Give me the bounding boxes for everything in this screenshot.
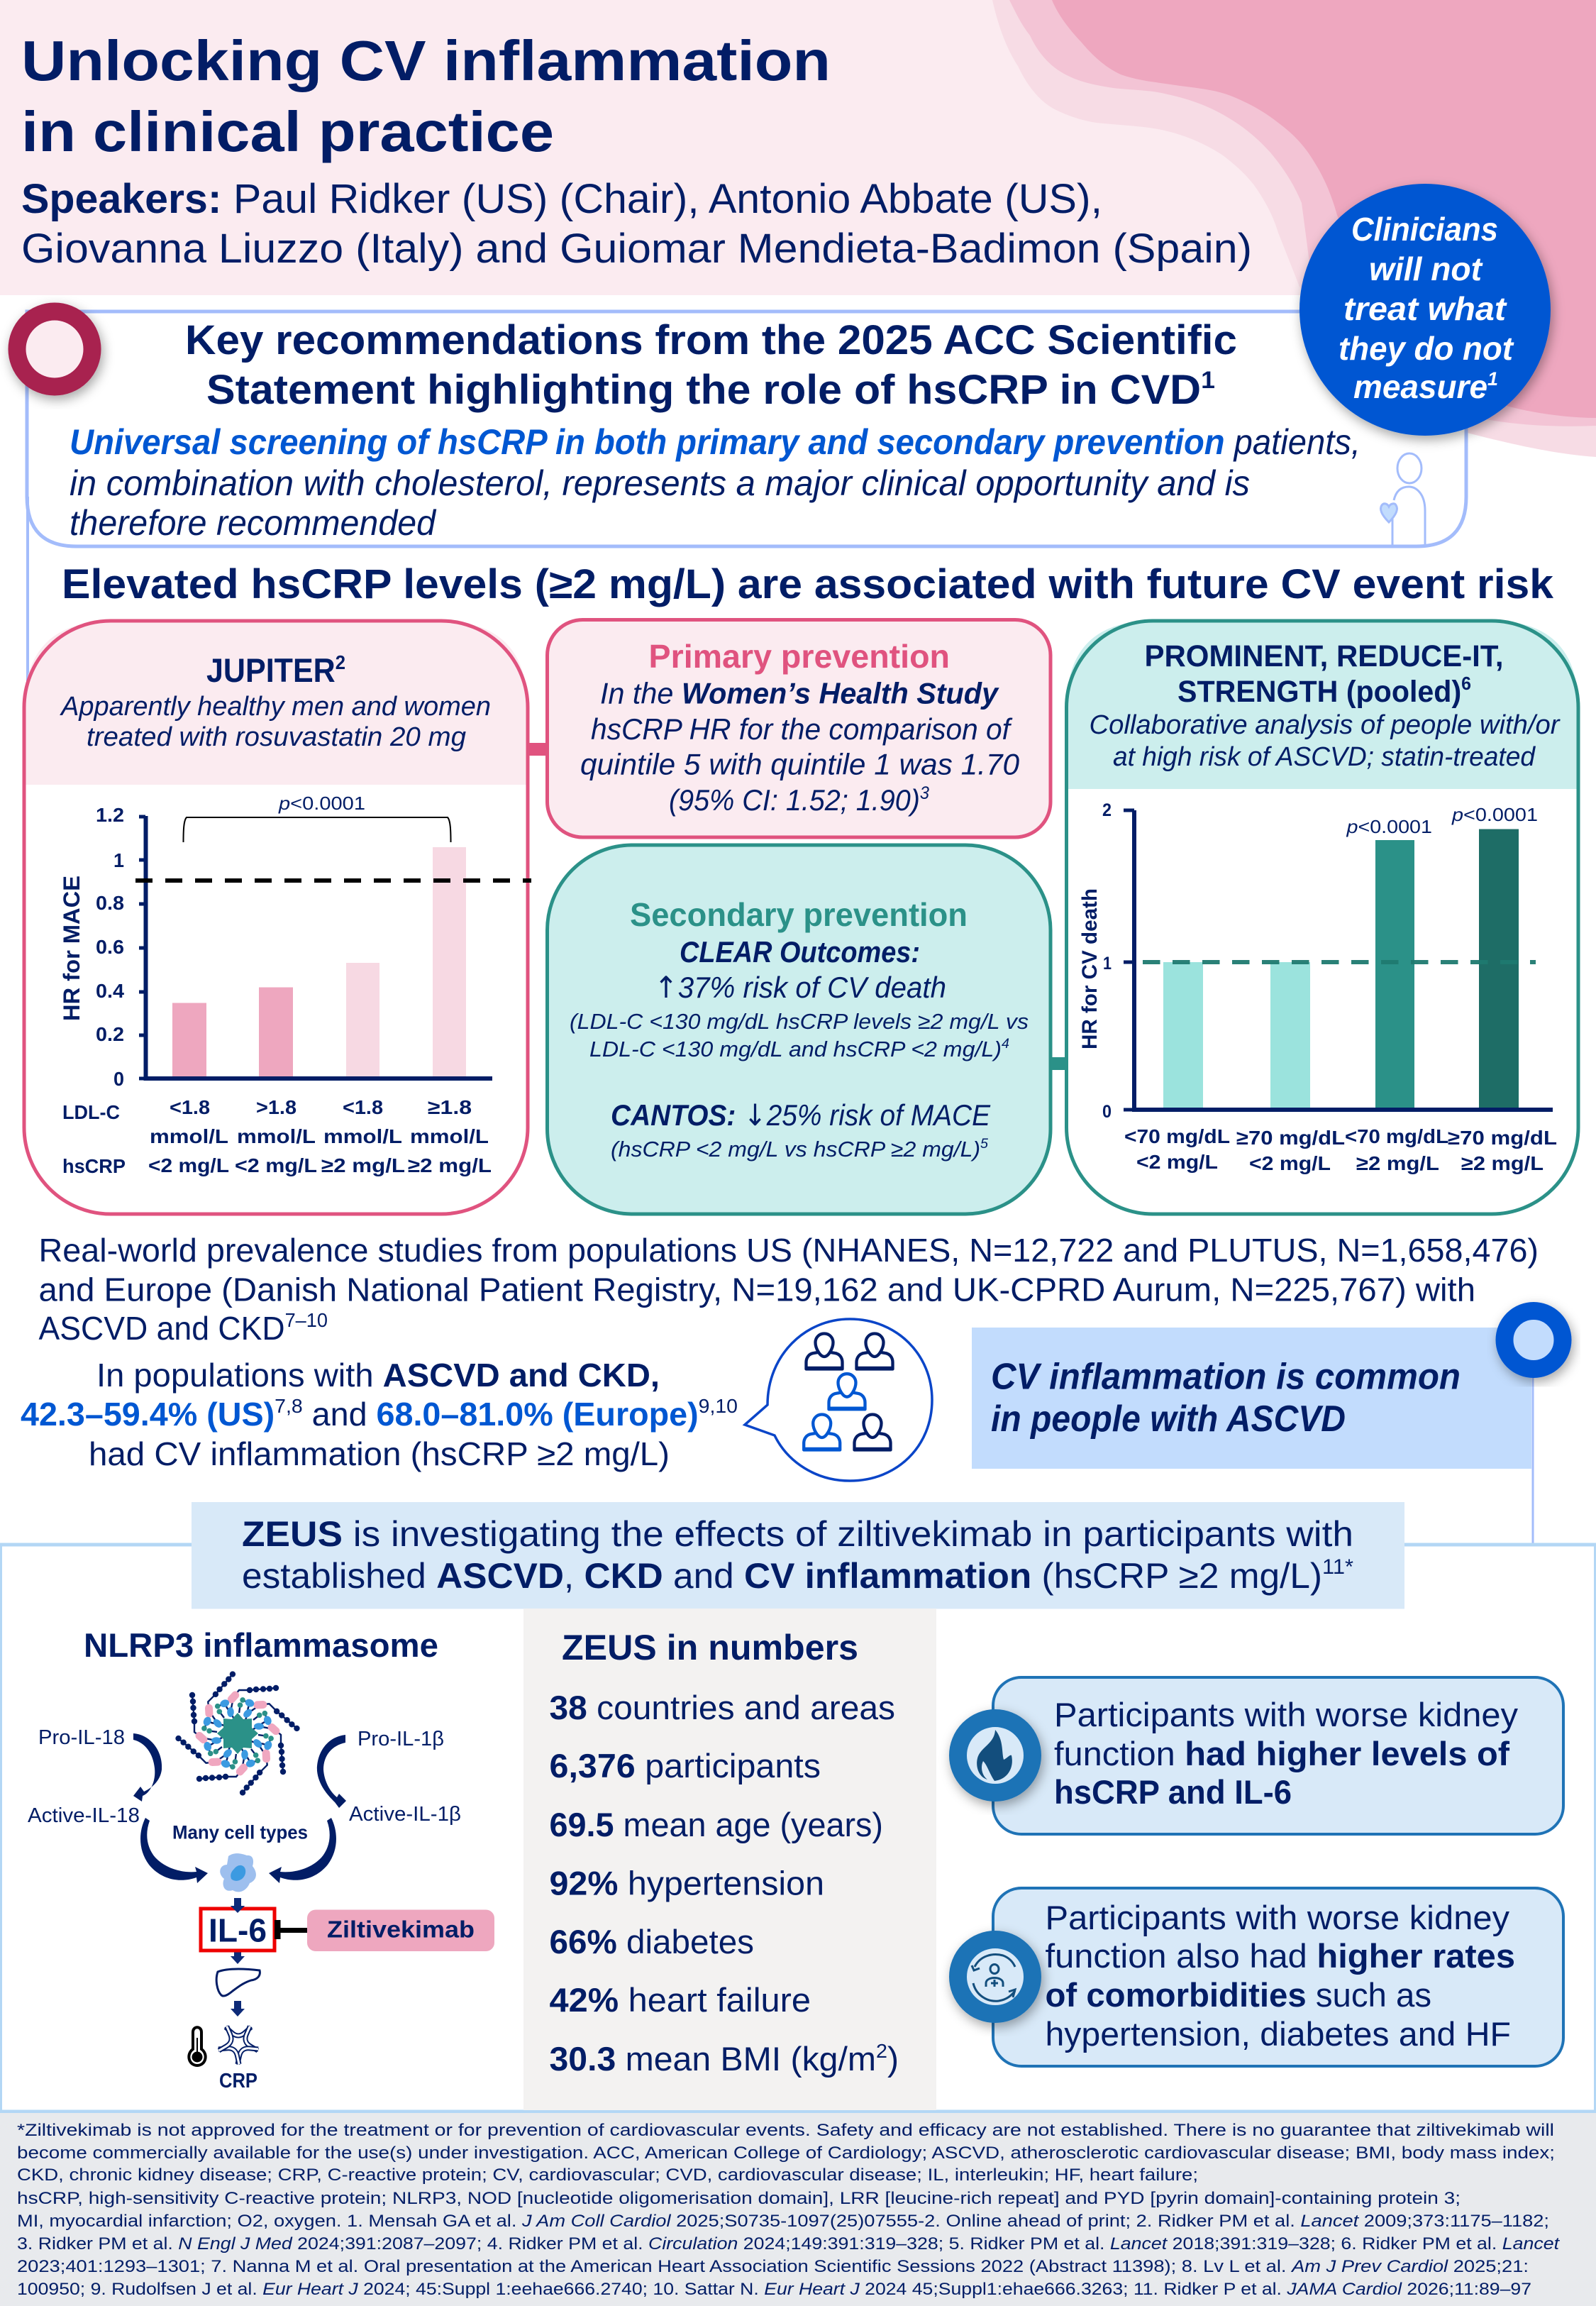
pooled description xyxy=(1090,710,1561,772)
bar chart: HR for MACE: 1.2 xyxy=(96,804,124,826)
callout: CV inflammation is common: CV inflammation is common xyxy=(991,1357,1461,1398)
JUPITER description xyxy=(60,692,491,752)
heading: elevated hsCRP: Elevated hsCRP levels (≥2 mg/L) are associated with future CV event risk xyxy=(62,561,1554,607)
speakers xyxy=(21,176,1252,272)
footer: references and abbreviations: 2023;401:1293–1301; 7. Nanna M et al. Oral presentation at the American Heart Association Scientific Sessions 2022 (Abstract 11398); 8. Lv L et al. Am J Prev Cardiol 2025;21: xyxy=(17,2257,1529,2276)
panel: secondary prevention: ↑37% risk of CV death xyxy=(654,970,946,1005)
bar chart: HR for MACE: LDL-C xyxy=(62,1101,120,1123)
panel: primary prevention xyxy=(548,620,1051,837)
bar chart: HR for MACE: <1.8 xyxy=(343,1096,383,1118)
footer: references and abbreviations: CKD, chronic kidney disease; CRP, C-reactive protein; CV, cardiovascular; CVD, cardiovascular disease; IL, interleukin; HF, heart failure; xyxy=(17,2166,1198,2185)
panel: key recommendations xyxy=(27,311,1466,681)
footer: references and abbreviations: *Ziltivekimab is not approved for the treatment or for prevention of cardiovascular events. Safety and efficacy are not established. There is no guarantee that ziltivekimab will xyxy=(17,2121,1554,2140)
JUPITER heading: JUPITER xyxy=(206,651,348,689)
ZEUS banner xyxy=(192,1502,1404,1609)
text: prevalence results: 9,10 xyxy=(699,1395,738,1417)
NLRP3 diagram: Active-IL-1β xyxy=(349,1803,461,1826)
bar chart: HR for CV death: ≥2 mg/L xyxy=(1356,1152,1439,1174)
NLRP3 heading: NLRP3 inflammasome xyxy=(84,1626,438,1664)
heading: key recommendations xyxy=(185,317,1237,413)
panel: ZEUS in numbers: 6,376 participants xyxy=(549,1747,821,1784)
panel: primary prevention: (95% CI: 1.52; 1.90) xyxy=(669,783,936,817)
icon: person in cycle xyxy=(958,1940,1033,2014)
panel: secondary prevention: 5 xyxy=(980,1137,988,1152)
bar chart: HR for CV death: HR for CV death xyxy=(1078,888,1102,1049)
bar chart: HR for MACE: mmol/L xyxy=(237,1125,316,1147)
callout: clinicians: Clinicians xyxy=(1351,211,1498,248)
footer: references and abbreviations: hsCRP, high-sensitivity C-reactive protein; NLRP3, NOD [nucleotide oligomerisation domain], LRR [leucine-rich repeat] and PYD [pyrin domain]-containing protein 3; xyxy=(17,2189,1461,2208)
callout: CV inflammation is common: in people with ASCVD xyxy=(991,1399,1346,1440)
bar chart: HR for MACE: ≥2 mg/L xyxy=(321,1154,405,1176)
pooled description: Collaborative analysis of people with/or xyxy=(1090,710,1561,740)
icon: flame xyxy=(958,1719,1033,1792)
panel: ZEUS in numbers: 92% hypertension xyxy=(549,1865,824,1902)
speakers: Speakers: Paul Ridker (US) (Chair), Antonio Abbate (US), xyxy=(21,176,1102,222)
bar chart: HR for CV death: ≥2 mg/L xyxy=(1461,1152,1544,1174)
text: real-world prevalence studies: and Europe (Danish National Patient Registry, N=19,162 and UK-CPRD Aurum, N=225,767) with xyxy=(38,1271,1475,1308)
bar chart: HR for CV death: 1 xyxy=(1103,954,1112,973)
panel: JUPITER xyxy=(24,621,531,1214)
speakers: Giovanna Liuzzo (Italy) and Guiomar Mendieta-Badimon (Spain) xyxy=(21,226,1252,272)
bar chart: HR for MACE: mmol/L xyxy=(323,1125,402,1147)
icon: speech bubble with people xyxy=(745,1319,932,1481)
panel: secondary prevention: (hsCRP <2 mg/L vs hsCRP ≥2 mg/L) xyxy=(611,1137,968,1162)
bar chart: HR for MACE: HR for MACE xyxy=(59,876,84,1021)
bar chart: HR for CV death: <70 mg/dL xyxy=(1124,1125,1230,1147)
pooled heading: PROMINENT, REDUCE-IT, xyxy=(1145,639,1504,673)
callout: clinicians: measure xyxy=(1353,368,1487,405)
bar chart: HR for MACE: p<0.0001 xyxy=(278,793,365,814)
panel: primary prevention: quintile 5 with quintile 1 was 1.70 xyxy=(580,748,1020,780)
NLRP3 diagram: Pro-IL-1β xyxy=(358,1728,444,1750)
panel: secondary prevention xyxy=(548,845,1051,1214)
callout: clinicians xyxy=(1299,184,1551,436)
bar chart: HR for MACE: >1.8 xyxy=(256,1096,297,1118)
panel: secondary prevention: CLEAR Outcomes: xyxy=(680,935,920,969)
callout: higher rates of comorbidities: function also had higher rates xyxy=(1046,1937,1515,1975)
text: prevalence results: and xyxy=(303,1396,377,1433)
panel: ZEUS in numbers: ZEUS in numbers xyxy=(562,1628,858,1667)
Ziltivekimab label xyxy=(307,1910,494,1951)
bar chart: HR for MACE: mmol/L xyxy=(410,1125,489,1147)
bar chart: HR for MACE: 0.6 xyxy=(96,936,124,958)
panel: secondary prevention: CANTOS: ↓25% risk of MACE xyxy=(611,1098,991,1132)
icon: blue ring xyxy=(1504,1311,1563,1369)
panel: ZEUS in numbers: 69.5 mean age (years) xyxy=(549,1806,883,1843)
recommendation text: in combination with cholesterol, represents a major clinical opportunity and is xyxy=(70,463,1250,503)
text: real-world prevalence studies: 7–10 xyxy=(285,1309,328,1331)
bar chart: HR for MACE: <2 mg/L xyxy=(235,1154,317,1176)
pooled heading: 6 xyxy=(1461,673,1471,694)
bar chart: HR for CV death: ≥70 mg/dL xyxy=(1448,1127,1557,1149)
connector line xyxy=(1532,1369,1534,1544)
callout: CV inflammation is common xyxy=(972,1328,1531,1469)
panel: ZEUS in numbers xyxy=(523,1609,936,2110)
callout: higher hsCRP and IL-6 xyxy=(958,1677,1563,1834)
icon: CRP pentamer xyxy=(218,2026,258,2064)
recommendation text: therefore recommended xyxy=(70,503,437,543)
callout: higher hsCRP and IL-6: Participants with worse kidney xyxy=(1054,1696,1519,1733)
callout: clinicians: they do not xyxy=(1339,330,1514,367)
icon: person with heart xyxy=(1380,453,1425,546)
NLRP3 diagram: Many cell types xyxy=(172,1822,308,1843)
bar chart: HR for CV death: <70 mg/dL xyxy=(1345,1125,1448,1147)
bar chart: HR for MACE xyxy=(59,793,531,1177)
title: in clinical practice xyxy=(21,100,554,163)
title xyxy=(21,29,831,163)
inhibition bar xyxy=(275,1920,307,1939)
bar chart: HR for MACE: <1.8 xyxy=(170,1096,210,1118)
callout: higher hsCRP and IL-6: function had higher levels of xyxy=(1054,1735,1509,1772)
panel: primary prevention: 3 xyxy=(920,783,929,803)
text: prevalence results: 68.0–81.0% (Europe) xyxy=(377,1396,699,1433)
connectors xyxy=(528,743,1068,1070)
callout: higher rates of comorbidities: of comorbidities such as xyxy=(1046,1976,1431,2014)
heading: key recommendations: Statement highlighting the role of hsCRP in CVD xyxy=(206,367,1154,413)
recommendation text xyxy=(70,422,1361,543)
icon: thermometer xyxy=(189,2027,206,2065)
bar chart: HR for MACE: <2 mg/L xyxy=(148,1154,229,1176)
bar chart: HR for MACE: ≥2 mg/L xyxy=(408,1154,492,1176)
text: prevalence results xyxy=(21,1357,738,1472)
panel: ZEUS in numbers: ) xyxy=(887,2040,899,2078)
bar chart: HR for MACE: 0.8 xyxy=(96,892,124,914)
IL-6 box xyxy=(201,1905,275,1951)
footer: references and abbreviations xyxy=(0,2113,1596,2306)
panel: ZEUS in numbers: 30.3 mean BMI (kg/m xyxy=(549,2040,870,2078)
bar chart: HR for CV death: <2 mg/L xyxy=(1249,1152,1331,1174)
callout: clinicians: 1 xyxy=(1487,368,1498,390)
bar chart: HR for MACE: ≥1.8 xyxy=(428,1096,472,1118)
bar chart: HR for MACE: 1 xyxy=(113,849,124,871)
panel: PROMINENT, REDUCE-IT, STRENGTH xyxy=(1067,621,1578,1214)
footer: references and abbreviations: 100950; 9. Rudolfsen J et al. Eur Heart J 2024; 45:Suppl 1:eehae666.2740; 10. Sattar N. Eur Heart J 2024 45;Suppl1:ehae666.3263; 11. Ridker P et al. JAMA Cardiol 2026;11:89–97 xyxy=(17,2280,1531,2299)
heading: key recommendations: 1 xyxy=(1201,367,1215,394)
bar chart: HR for MACE: mmol/L xyxy=(150,1125,228,1147)
footer: references and abbreviations: MI, myocardial infarction; O2, oxygen. 1. Mensah GA et al. J Am Coll Cardiol 2025;S0735-1097(25)07555-2. Online ahead of print; 2. Ridker PM et al. Lancet 2009;373:1175–1182; xyxy=(17,2212,1549,2231)
ZEUS banner: ZEUS is investigating the effects of ziltivekimab in participants with xyxy=(242,1514,1353,1554)
JUPITER description: treated with rosuvastatin 20 mg xyxy=(87,722,466,752)
Ziltivekimab label: Ziltivekimab xyxy=(327,1916,475,1943)
callout: higher rates of comorbidities: Participants with worse kidney xyxy=(1046,1899,1510,1936)
text: real-world prevalence studies: ASCVD and CKD xyxy=(38,1310,292,1347)
NLRP3 diagram: CRP xyxy=(219,2070,257,2092)
callout: clinicians: will not xyxy=(1369,250,1483,287)
NLRP3 diagram xyxy=(28,1626,494,2092)
panel: secondary prevention: LDL-C <130 mg/dL and hsCRP <2 mg/L) xyxy=(589,1037,987,1061)
IL-6 box: IL-6 xyxy=(209,1911,267,1948)
panel: secondary prevention: 4 xyxy=(1002,1037,1009,1052)
callout: higher hsCRP and IL-6: hsCRP and IL-6 xyxy=(1054,1773,1292,1811)
panel: ZEUS in numbers: 2 xyxy=(876,2040,887,2062)
arrows: curved pathways xyxy=(133,1733,346,1883)
NLRP3 diagram: Pro-IL-18 xyxy=(38,1726,125,1749)
text: prevalence results: 42.3–59.4% (US) xyxy=(21,1396,275,1433)
panel: secondary prevention: (LDL-C <130 mg/dL hsCRP levels ≥2 mg/L vs xyxy=(570,1009,1029,1034)
callout: higher rates of comorbidities xyxy=(958,1888,1563,2066)
title: Unlocking CV inflammation xyxy=(21,29,831,92)
bar chart: HR for MACE: hsCRP xyxy=(62,1155,126,1177)
callout: clinicians: treat what xyxy=(1343,290,1507,327)
footer: references and abbreviations: 3. Ridker PM et al. N Engl J Med 2024;391:2087–2097; 4. Ridker PM et al. Circulation 2024;149:391:319–328; 5. Ridker PM et al. Lancet 2018;391:319–328; 6. Ridker PM et al. Lancet xyxy=(17,2234,1560,2253)
panel: primary prevention: hsCRP HR for the comparison of xyxy=(591,712,1013,746)
JUPITER heading: 2 xyxy=(336,651,345,673)
icon: liver xyxy=(216,1969,260,1996)
callout: higher rates of comorbidities: hypertension, diabetes and HF xyxy=(1046,2015,1511,2053)
panel: primary prevention: In the Women’s Health Study xyxy=(600,677,1000,710)
bar chart: HR for MACE: 0.4 xyxy=(96,980,124,1002)
panel: ZEUS xyxy=(0,1502,1596,2112)
text: real-world prevalence studies: Real-world prevalence studies from populations US (NHANES, N=12,722 and PLUTUS, N=1,658,476) xyxy=(38,1232,1539,1269)
bar chart: HR for MACE: 0.2 xyxy=(96,1023,124,1045)
bar chart: HR for CV death: 0 xyxy=(1102,1102,1112,1122)
icon: cell xyxy=(220,1853,256,1892)
pooled description: at high risk of ASCVD; statin-treated xyxy=(1113,742,1536,772)
panel: ZEUS in numbers: 66% diabetes xyxy=(549,1923,754,1960)
text: prevalence results: In populations with ASCVD and CKD, xyxy=(96,1357,660,1394)
text: prevalence results: had CV inflammation (hsCRP ≥2 mg/L) xyxy=(89,1435,670,1472)
header background xyxy=(0,0,1596,457)
heading: key recommendations: Key recommendations from the 2025 ACC Scientific xyxy=(185,317,1237,363)
text: real-world prevalence studies xyxy=(38,1232,1539,1347)
footer: references and abbreviations: become commercially available for the use(s) under investigation. ACC, American College of Cardiology; ASCVD, atherosclerotic cardiovascular disease; BMI, body mass index; xyxy=(17,2144,1555,2163)
bar chart: HR for CV death: p<0.0001 xyxy=(1346,816,1432,837)
icon: crimson ring xyxy=(17,311,92,387)
bar chart: HR for CV death xyxy=(1078,800,1557,1174)
pooled heading: STRENGTH (pooled) xyxy=(1177,675,1474,709)
bar chart: HR for MACE: 0 xyxy=(113,1068,124,1090)
ZEUS banner: 11* xyxy=(1322,1555,1353,1579)
bar chart: HR for CV death: p<0.0001 xyxy=(1451,804,1538,825)
bar chart: HR for CV death: 2 xyxy=(1102,800,1112,820)
panel: secondary prevention: Secondary prevention xyxy=(630,896,968,933)
panel: primary prevention: Primary prevention xyxy=(648,638,950,675)
bar chart: HR for CV death: ≥70 mg/dL xyxy=(1236,1127,1345,1149)
NLRP3 diagram: Active-IL-18 xyxy=(28,1804,140,1827)
recommendation text: Universal screening of hsCRP in both primary and secondary prevention patients, xyxy=(70,422,1361,462)
icon: inflammasome xyxy=(174,1670,301,1797)
pooled heading xyxy=(1145,639,1504,709)
panel: ZEUS in numbers: 42% heart failure xyxy=(549,1981,811,2019)
JUPITER description: Apparently healthy men and women xyxy=(60,692,491,722)
bar chart: HR for CV death: <2 mg/L xyxy=(1136,1151,1218,1173)
text: prevalence results: 7,8 xyxy=(275,1395,303,1417)
ZEUS banner: established ASCVD, CKD and CV inflammation (hsCRP ≥2 mg/L) xyxy=(242,1556,1314,1596)
panel: ZEUS in numbers: 38 countries and areas xyxy=(549,1689,895,1726)
arrows: down xyxy=(231,1898,245,2017)
